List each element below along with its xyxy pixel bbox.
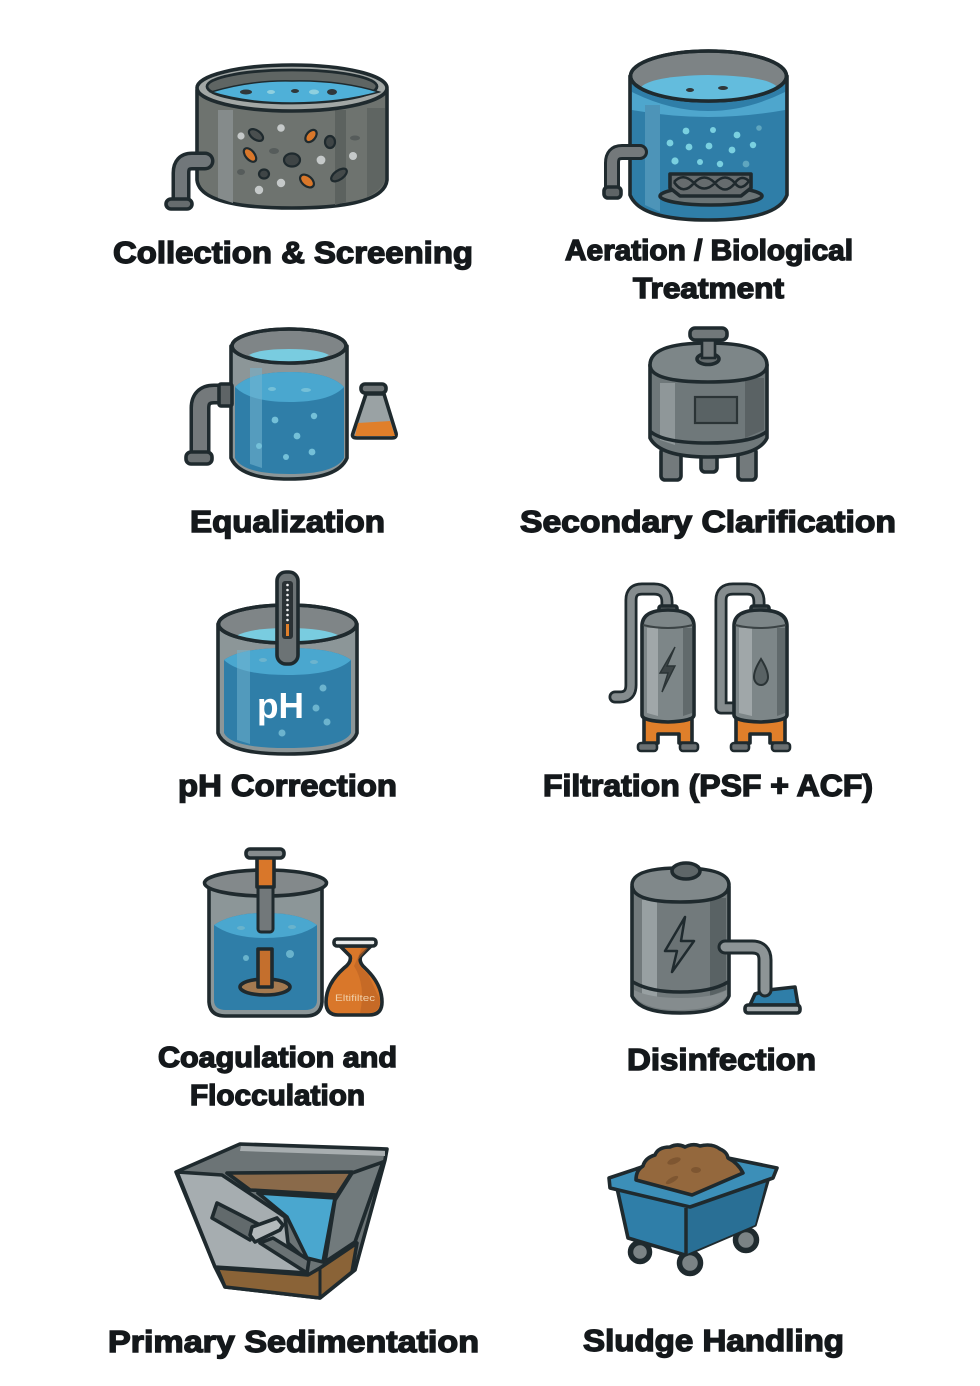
icon: filter pair	[615, 589, 790, 751]
tanks	[659, 606, 677, 614]
label: Secondary Clarification	[520, 504, 896, 539]
impeller	[240, 979, 290, 995]
pipe	[612, 152, 640, 190]
label: pH Correction	[178, 768, 397, 803]
icon: screening tank	[166, 65, 387, 209]
panel: equalization	[186, 329, 396, 539]
icon: UV vessel	[632, 863, 800, 1013]
diffuser	[660, 187, 762, 205]
label: Aeration / Biological	[565, 235, 853, 267]
icon: mixer beaker	[204, 849, 382, 1016]
label: Sludge Handling	[583, 1323, 844, 1358]
panel: coagulation and flocculation	[158, 849, 397, 1112]
panel: secondary clarification	[520, 328, 896, 539]
label: Equalization	[190, 504, 385, 539]
icon: clarifier	[650, 328, 767, 480]
label: Coagulation and	[158, 1042, 397, 1074]
panel: aeration: Treatment	[633, 273, 785, 305]
pipe	[725, 947, 765, 990]
panel: primary sedimentation	[108, 1144, 479, 1359]
icon: mixer beaker: Eltifiltec	[335, 993, 375, 1004]
pH text: pH	[257, 685, 304, 726]
drop	[754, 659, 768, 685]
bolt	[660, 647, 675, 692]
panel: coagulation and flocculation: Flocculation	[190, 1080, 365, 1112]
orange bases	[644, 716, 692, 743]
icon: pH tank	[218, 572, 357, 754]
label: Filtration (PSF + ACF)	[543, 768, 873, 803]
panel: aeration	[565, 51, 853, 305]
coagulant bag	[326, 946, 382, 1015]
panel: filtration	[543, 589, 873, 803]
pH probe	[277, 572, 298, 664]
label: Primary Sedimentation	[108, 1324, 479, 1359]
bolt	[665, 917, 694, 972]
panel: disinfection	[627, 863, 816, 1077]
panel: sludge handling	[583, 1145, 844, 1358]
icon: sedimentation basin	[176, 1144, 387, 1298]
debris	[241, 127, 349, 190]
flask	[352, 394, 396, 438]
wheels	[630, 1230, 756, 1274]
pipe	[181, 161, 205, 198]
icon: equalization tank	[186, 329, 396, 479]
pipe	[200, 394, 222, 452]
icon: aeration tank	[604, 51, 787, 220]
label: Disinfection	[627, 1042, 816, 1077]
outlet base	[750, 987, 798, 1005]
label: Collection & Screening	[113, 235, 473, 270]
panel: collection and screening	[113, 65, 473, 270]
icon: sludge cart	[609, 1145, 777, 1274]
panel: pH correction	[178, 572, 397, 803]
scraper	[212, 1203, 260, 1240]
